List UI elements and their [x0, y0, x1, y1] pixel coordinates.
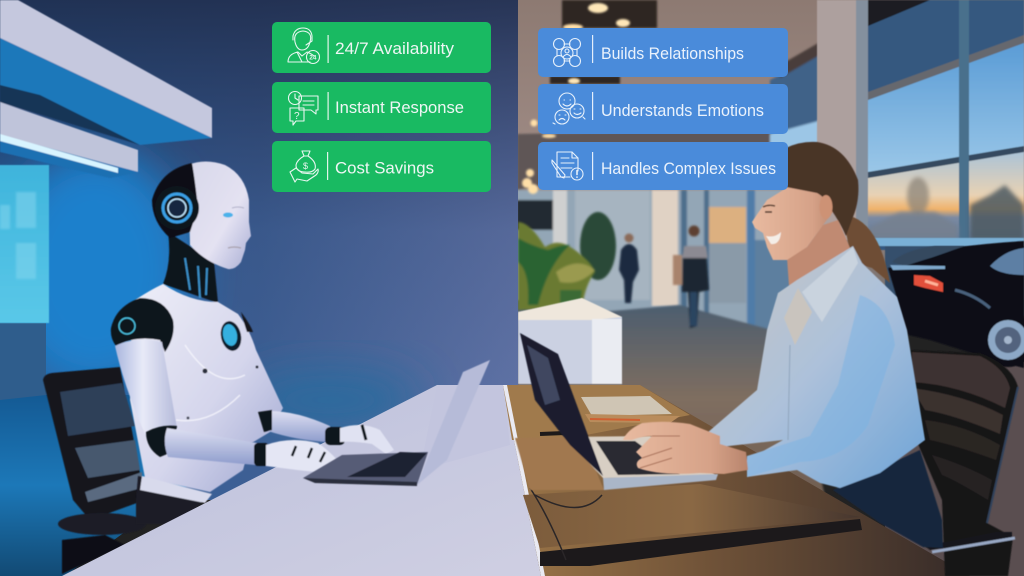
- icon: money bag in hand: $: [303, 161, 308, 171]
- card: Understands Emotions: Understands Emotions: [601, 101, 764, 120]
- shoulder cap: [111, 298, 174, 352]
- card: Handles Complex Issues: Handles Complex Issues: [601, 159, 776, 178]
- ear: [820, 195, 832, 219]
- chest core: [218, 319, 244, 353]
- neck: [787, 220, 850, 335]
- card group: AI strengths: [272, 22, 491, 192]
- robot body: [111, 162, 283, 524]
- upper arm: [115, 340, 177, 436]
- card: Understands Emotions: [538, 84, 788, 134]
- hair: [786, 142, 858, 236]
- card: Instant Response: Instant Response: [335, 98, 464, 117]
- far arm: [266, 411, 330, 442]
- robot pelvis: [136, 476, 212, 524]
- people in background: [619, 226, 709, 328]
- planter: [518, 298, 622, 384]
- woman: [623, 142, 943, 548]
- panel: showroom background: [517, 0, 1024, 576]
- windows: [817, 0, 1024, 316]
- card: Builds Relationships: [538, 28, 788, 77]
- lower left wall: [0, 323, 46, 401]
- far windows above woman: [770, 55, 820, 134]
- card: Handles Complex Issues: [538, 142, 788, 190]
- floor: [0, 395, 250, 576]
- shirt: [707, 246, 925, 488]
- background tree: [580, 212, 616, 280]
- icon: connected people: [554, 38, 580, 66]
- right floor: [885, 362, 1024, 576]
- card: Cost Savings: [272, 141, 491, 192]
- desk: white: [62, 385, 541, 576]
- eye: [223, 212, 233, 218]
- hand near: [266, 440, 343, 474]
- ceiling lights: [522, 3, 630, 194]
- laptop: robot: [303, 360, 490, 486]
- elbow: [146, 426, 177, 457]
- forearm: [165, 428, 257, 465]
- card: Builds Relationships: Builds Relationships: [601, 44, 744, 63]
- card: 24/7 Availability: [272, 22, 491, 73]
- chair: woman: [910, 350, 1018, 576]
- interior glass: [517, 190, 827, 325]
- ceiling soffit: [0, 0, 212, 178]
- panel: robot wall: [0, 0, 518, 576]
- icon: clock and chat bubbles: ?: [294, 111, 300, 122]
- icon: document with alert: [552, 152, 583, 180]
- head: [188, 162, 251, 269]
- icon: clock and chat bubbles: [288, 92, 318, 125]
- earpiece: [155, 186, 199, 230]
- icon: emotion faces: [553, 93, 585, 124]
- robot arms: [146, 410, 394, 474]
- papers: [581, 396, 672, 416]
- skirt: [833, 450, 943, 548]
- hand far: [340, 425, 394, 454]
- card: 24/7 Availability: 24/7 Availability: [335, 39, 455, 58]
- armrest: [932, 538, 1015, 552]
- ponytail: [846, 217, 890, 283]
- laptop: human: [515, 333, 718, 490]
- card: Cost Savings: Cost Savings: [335, 158, 434, 178]
- parked car: [888, 241, 1024, 368]
- card: Instant Response: [272, 82, 491, 133]
- desk: wood: [503, 385, 970, 576]
- chair: robot: [43, 367, 146, 574]
- tree silhouettes: [868, 177, 1024, 240]
- floor: [517, 300, 830, 520]
- face: [752, 185, 838, 260]
- robot torso: [130, 284, 283, 492]
- chair seat: [58, 513, 146, 535]
- robot neck: [163, 232, 218, 303]
- icon: money bag in hand: [290, 151, 318, 182]
- wall screen: [0, 165, 49, 323]
- card group: human strengths: [538, 28, 788, 190]
- ceiling beam: [562, 0, 657, 28]
- car park ground: [868, 238, 1024, 246]
- plant: [518, 222, 595, 310]
- icon: agent with 24 badge: 24: [309, 54, 317, 62]
- hands: [623, 422, 748, 474]
- icon: agent with 24 badge: [288, 28, 320, 64]
